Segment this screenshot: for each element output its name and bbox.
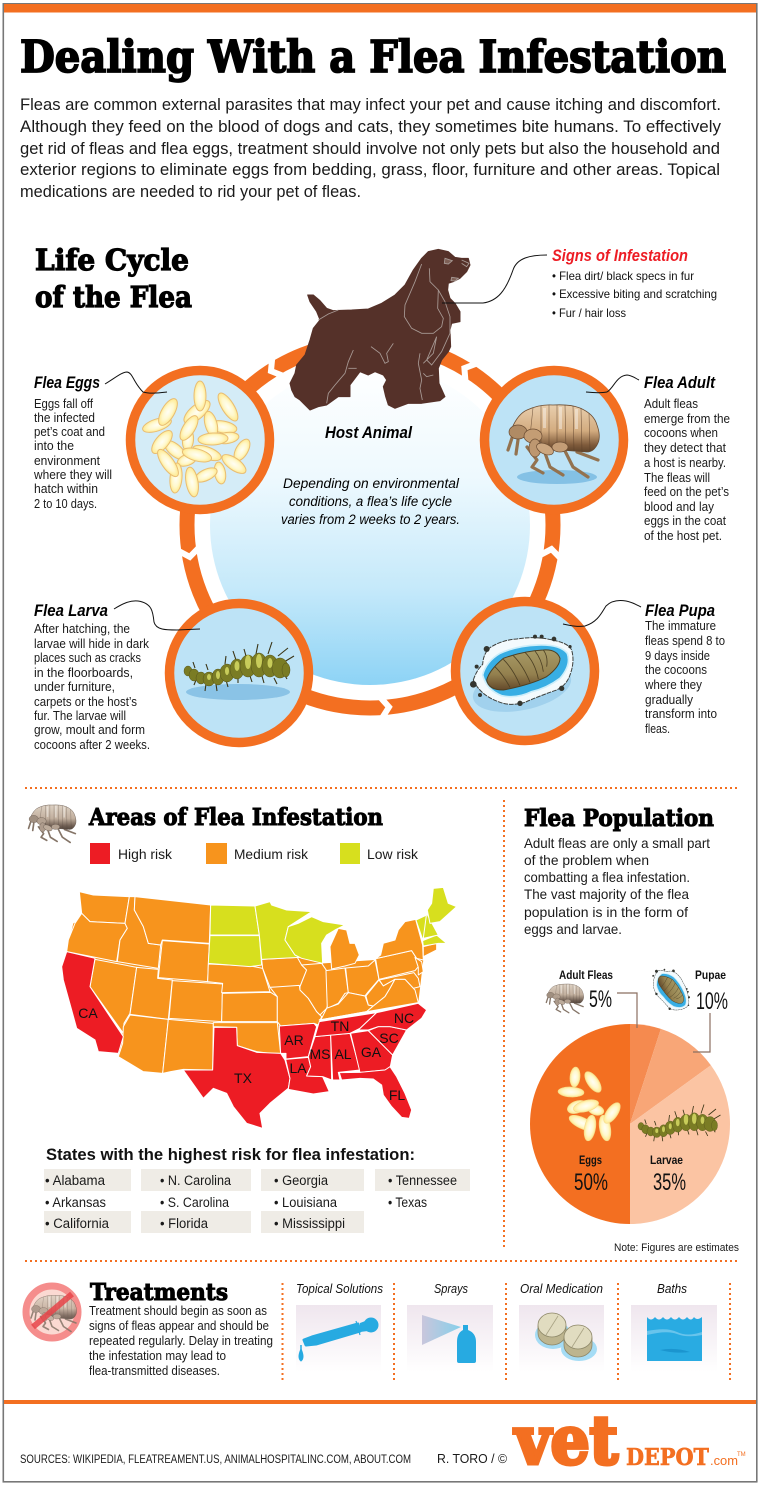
callout: signs of infestation: • Excessive biting and scratching [552, 287, 717, 301]
text: flea eggs [33, 372, 167, 511]
text: flea adult: they detect that [644, 441, 726, 455]
intro paragraph: exterior regions to eliminate eggs from bedding, grass, floor, furniture and other areas. Topical [20, 161, 720, 179]
dog illustration [290, 249, 470, 410]
text: flea population: population is in the form of [524, 904, 688, 920]
intro paragraph: medications are needed to rid your pet of fleas. [20, 183, 361, 201]
text: flea adult: emerge from the [644, 412, 730, 426]
state abbreviations: LA [289, 1060, 307, 1076]
text: flea pupa [563, 601, 725, 736]
map: united states flea risk [62, 887, 457, 1128]
text: flea adult: Flea Adult [644, 374, 716, 392]
logo: vet depot: TM [737, 1452, 746, 1458]
label: host animal: Host Animal [325, 424, 412, 442]
text: flea eggs: 2 to 10 days. [34, 497, 97, 511]
list: highest risk states: • Mississippi [274, 1216, 345, 1231]
legend: risk levels: Medium risk [234, 846, 309, 862]
icon: eggs [558, 1067, 623, 1142]
state abbreviations: AR [284, 1032, 304, 1048]
text: flea pupa: fleas spend 8 to [645, 634, 725, 648]
list: highest risk states: • Tennessee [388, 1173, 457, 1188]
heading: life cycle: of the Flea [35, 280, 192, 314]
state abbreviations: SC [379, 1030, 399, 1046]
list: highest risk states: • Georgia [274, 1173, 328, 1188]
label: adult fleas [546, 968, 613, 1014]
text: treatments: flea-transmitted diseases. [89, 1364, 220, 1378]
text: flea population: eggs and larvae. [524, 921, 622, 937]
heading: life cycle [35, 243, 192, 314]
text: flea adult: feed on the pet’s [644, 485, 729, 499]
logo: vet depot: DEPOT [626, 1444, 709, 1471]
text: flea pupa: Flea Pupa [645, 602, 715, 620]
label: larvae: 35% [653, 1169, 686, 1196]
intro paragraph: Although they feed on the blood of dogs and cats, they sometimes bite humans. To effectively [20, 118, 722, 136]
text: flea adult: blood and lay [644, 500, 715, 514]
text: flea adult: of the host pet. [644, 529, 722, 543]
text: flea pupa: 9 days inside [645, 649, 710, 663]
credit: R. TORO / © [437, 1451, 507, 1466]
icon: larva [638, 1104, 720, 1141]
text: flea population [524, 835, 710, 937]
text: treatments: repeated regularly. Delay in treating [89, 1334, 273, 1348]
treatment: baths [631, 1282, 717, 1372]
text: flea larva: grow, moult and form [34, 723, 145, 737]
treatment: oral medication: Oral Medication [520, 1282, 603, 1296]
intro paragraph: Fleas are common external parasites that may infect your pet and cause itching and discomfort. [20, 96, 721, 114]
treatment: sprays [407, 1282, 493, 1372]
text: flea adult: Adult fleas [644, 397, 698, 411]
text: flea eggs: hatch within [34, 482, 98, 496]
list: highest risk states [44, 1169, 470, 1233]
state abbreviations: CA [78, 1005, 98, 1021]
text: flea larva: fur. The larvae will [34, 709, 126, 723]
text: flea eggs: environment [34, 454, 100, 468]
text: flea population: The vast majority of the flea [524, 886, 689, 902]
text: flea adult: eggs in the coat [644, 514, 726, 528]
text: treatments: the infestation may lead to [89, 1349, 226, 1363]
text: flea eggs: where they will [33, 468, 112, 482]
text: life cycle duration: Depending on environmental [283, 476, 460, 491]
state abbreviations: TN [331, 1018, 349, 1034]
text: flea pupa: gradually [645, 693, 694, 707]
sources: SOURCES: WIKIPEDIA, FLEATREAMENT.US, ANIMALHOSPITALINC.COM, ABOUT.COM [20, 1454, 411, 1466]
text: life cycle duration [281, 476, 460, 527]
text: flea larva: larvae will hide in dark [34, 637, 150, 651]
text: flea population: of the problem when [524, 852, 649, 868]
callout: signs of infestation: • Flea dirt/ black specs in fur [552, 269, 694, 283]
state abbreviations: MS [310, 1046, 330, 1062]
list: highest risk states: • Arkansas [45, 1195, 106, 1210]
list: highest risk states: • S. Carolina [160, 1195, 229, 1210]
callout: signs of infestation [442, 247, 717, 320]
intro paragraph [20, 96, 722, 201]
list: highest risk states: • Louisiana [274, 1195, 337, 1210]
treatment: topical solutions: Topical Solutions [296, 1282, 383, 1296]
label: pupae [647, 962, 728, 1017]
intro paragraph: get rid of fleas and flea eggs, treatment should involve not only pets but also the household and [20, 140, 720, 158]
text: flea eggs: Flea Eggs [34, 374, 100, 392]
text: flea larva: under furniture, [34, 680, 115, 694]
treatment: sprays: Sprays [434, 1282, 468, 1296]
text: flea adult: The fleas will [644, 471, 710, 485]
circle: flea eggs [130, 370, 270, 510]
state abbreviations [78, 1005, 414, 1103]
label: adult fleas: 5% [589, 986, 612, 1013]
label: pupae: 10% [696, 988, 728, 1015]
text: treatments: signs of fleas appear and should be [89, 1319, 269, 1333]
text: flea eggs: pet’s coat and [34, 425, 105, 439]
text: flea eggs: Eggs fall off [34, 397, 93, 411]
logo: vet depot: .com [710, 1453, 738, 1468]
heading: life cycle: Life Cycle [35, 243, 189, 277]
text: flea pupa: the cocoons [645, 663, 707, 677]
state abbreviations: AL [334, 1046, 352, 1062]
label: eggs [574, 1153, 608, 1196]
heading: areas of flea infestation: Areas of Flea Infestation [88, 804, 383, 831]
text: flea pupa: The immature [645, 619, 716, 633]
state abbreviations: TX [234, 1070, 253, 1086]
logo: vet depot [513, 1402, 746, 1480]
callout: signs of infestation: Signs of Infestation [552, 247, 688, 265]
heading: highest risk states: States with the highest risk for flea infestation: [46, 1145, 415, 1164]
text: flea larva: After hatching, the [34, 622, 130, 636]
state abbreviations: NC [394, 1010, 414, 1026]
text: flea pupa: fleas. [645, 722, 670, 736]
state abbreviations: FL [389, 1087, 405, 1103]
note: Note: Figures are estimates [614, 1242, 739, 1254]
treatment: oral medication [519, 1282, 604, 1372]
label: pupae: Pupae [695, 968, 726, 982]
text: treatments [89, 1304, 273, 1378]
list: highest risk states: • Florida [160, 1216, 208, 1231]
text: flea adult: a host is nearby. [644, 456, 726, 470]
list: highest risk states: • Alabama [45, 1173, 105, 1188]
central blue disc [210, 365, 530, 685]
label: adult fleas: Adult Fleas [559, 968, 613, 982]
text: flea eggs: the infected [34, 411, 95, 425]
state abbreviations: GA [361, 1044, 382, 1060]
label: eggs: Eggs [579, 1153, 602, 1167]
text: flea pupa: transform into [645, 707, 717, 721]
heading: treatments: Treatments [90, 1279, 228, 1306]
circle: flea adult [484, 370, 624, 510]
icon: no fleas [26, 1286, 78, 1338]
heading: flea population: Flea Population [524, 805, 714, 832]
treatment: topical solutions [296, 1282, 383, 1372]
legend: risk levels: Low risk [367, 846, 419, 862]
text: flea larva [34, 601, 200, 752]
callout: signs of infestation: • Fur / hair loss [552, 306, 626, 320]
text: treatments: Treatment should begin as soon as [89, 1304, 267, 1318]
text: flea population: combatting a flea infestation. [524, 869, 690, 885]
text: flea adult [586, 374, 730, 543]
text: life cycle duration: conditions, a flea’s life cycle [289, 494, 452, 509]
text: flea larva: in the floorboards, [34, 666, 133, 680]
treatment: baths: Baths [657, 1282, 687, 1296]
text: flea larva: carpets or the host’s [34, 695, 137, 709]
cycle ring with arrows [172, 342, 567, 724]
text: flea larva: places such as cracks [34, 651, 141, 665]
circle: flea pupa [456, 602, 594, 740]
icon: flea, areas heading [29, 805, 76, 842]
text: flea eggs: into the [34, 439, 74, 453]
text: flea population: Adult fleas are only a small part [524, 835, 710, 851]
label: eggs: 50% [574, 1169, 608, 1196]
text: flea larva: cocoons after 2 weeks. [34, 738, 150, 752]
circle: flea larva [170, 604, 308, 742]
pie chart: flea population [530, 993, 730, 1224]
text: flea larva: Flea Larva [34, 602, 108, 620]
legend: risk levels: High risk [118, 846, 173, 862]
list: highest risk states: • California [45, 1216, 109, 1231]
label: larvae: Larvae [650, 1153, 683, 1167]
list: highest risk states: • Texas [388, 1195, 427, 1210]
list: highest risk states: • N. Carolina [160, 1173, 231, 1188]
label: larvae [650, 1153, 686, 1196]
text: flea pupa: where they [644, 678, 703, 692]
text: flea adult: cocoons when [644, 426, 718, 440]
legend: risk levels [90, 843, 419, 864]
text: life cycle duration: varies from 2 weeks to 2 years. [281, 512, 460, 527]
logo: vet depot: vet [513, 1402, 618, 1480]
